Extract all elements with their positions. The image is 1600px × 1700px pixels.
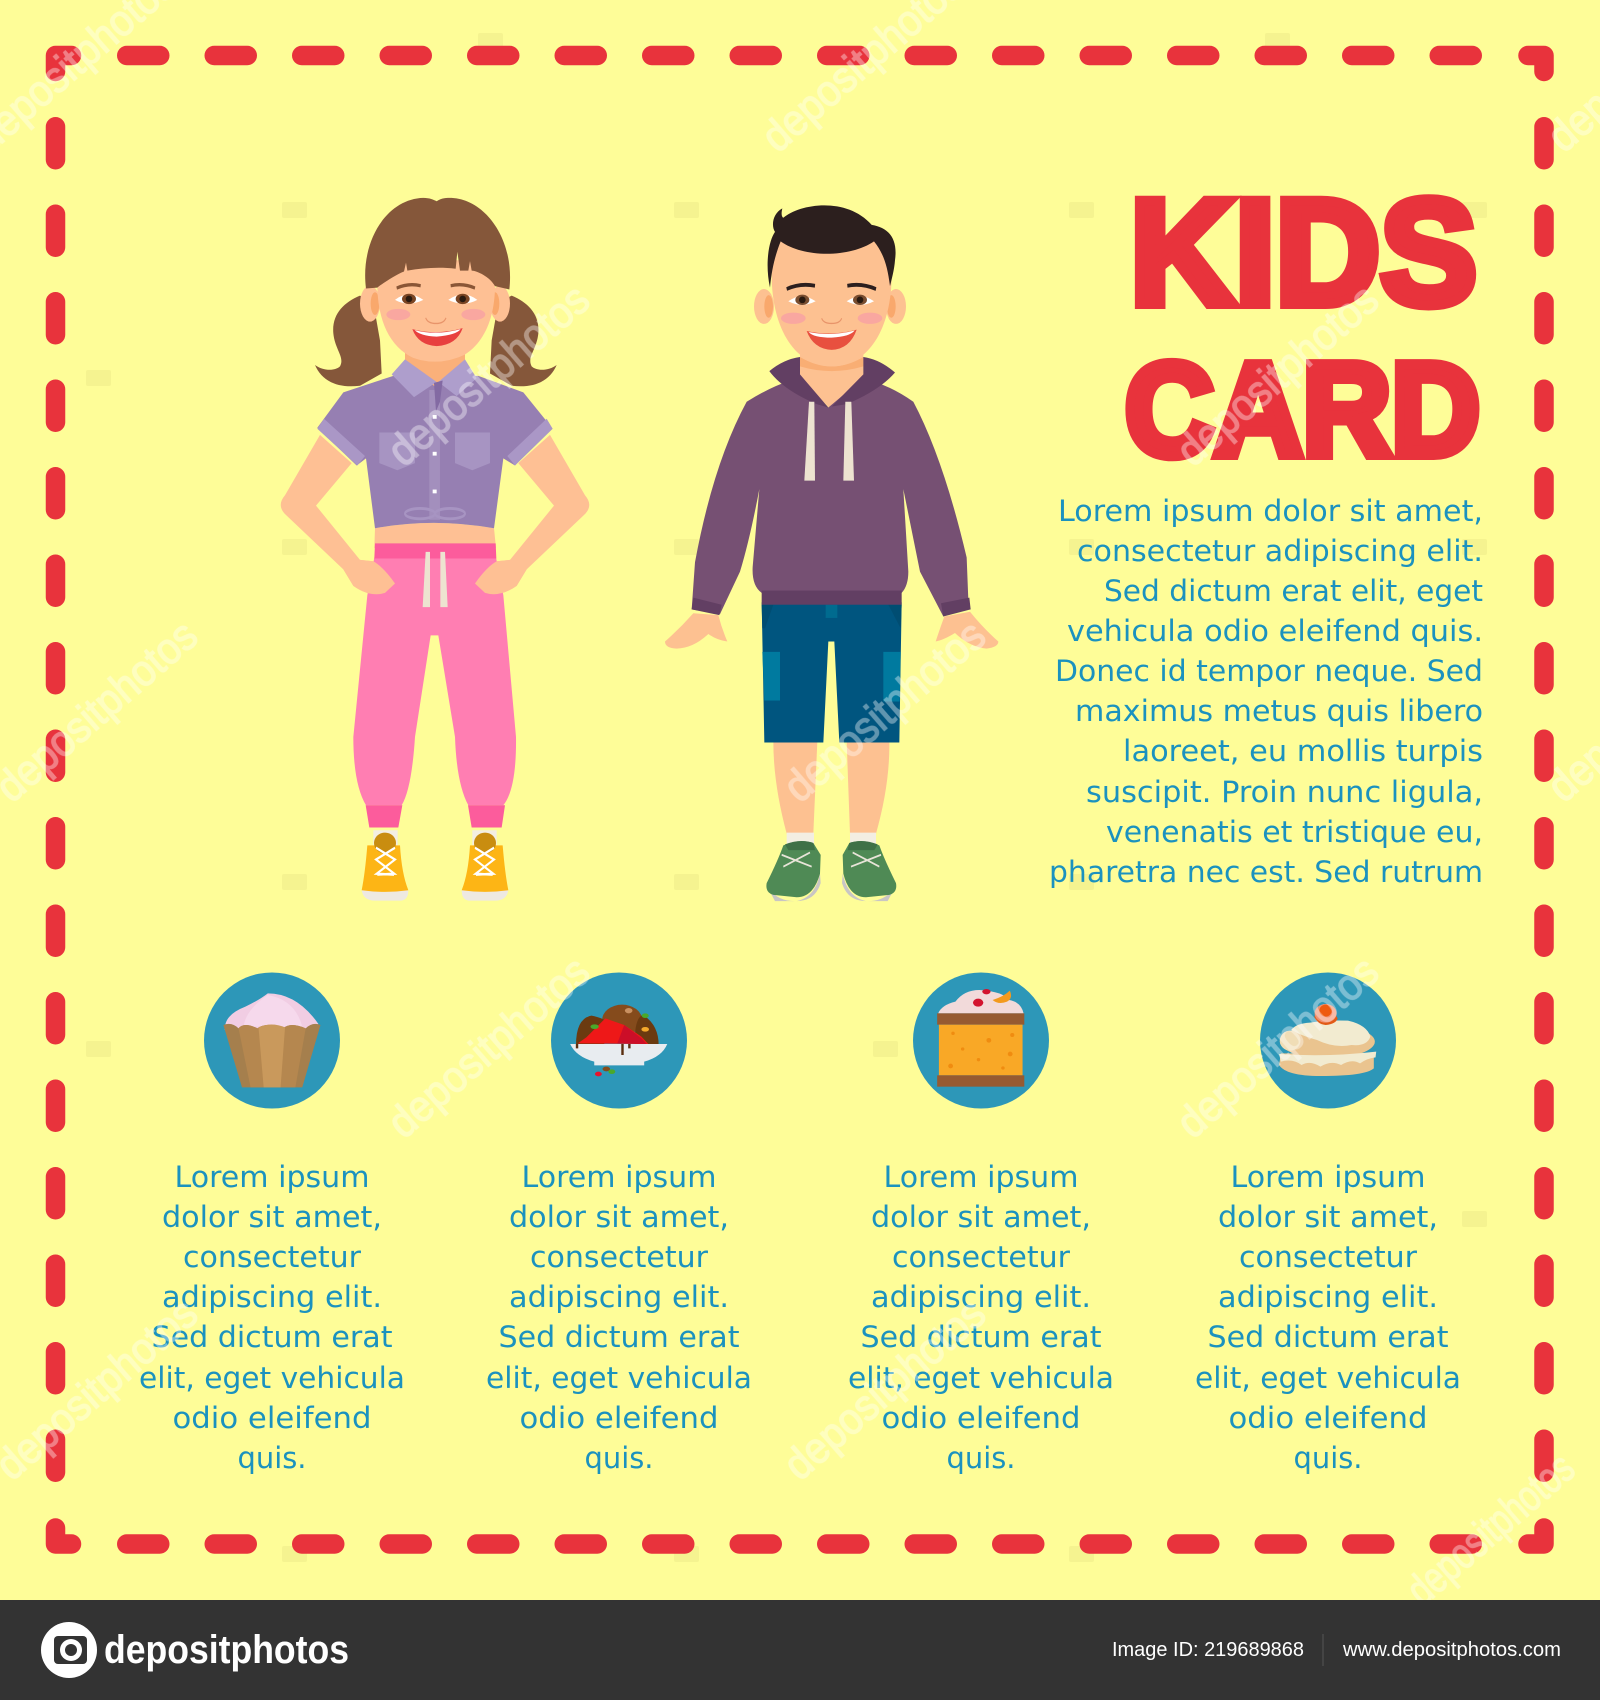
column text 1: adipiscing elit.	[162, 1280, 382, 1314]
column text 3: Lorem ipsum	[884, 1160, 1078, 1194]
boy character	[665, 205, 998, 901]
site url: www.depositphotos.com	[1342, 1639, 1561, 1661]
column text 3: Sed dictum erat	[860, 1320, 1102, 1354]
intro paragraph: maximus metus quis libero	[1075, 694, 1483, 728]
title: KIDS CARD: KIDS	[1130, 168, 1477, 336]
column text 4: Sed dictum erat	[1208, 1320, 1448, 1354]
watermarks: depositphotos	[774, 611, 995, 812]
column text 3: dolor sit amet,	[871, 1200, 1091, 1234]
column text 3: quis.	[946, 1441, 1016, 1475]
title: KIDS CARD	[1125, 168, 1480, 483]
icon: cupcake	[204, 972, 340, 1108]
column text 1: Sed dictum erat	[152, 1320, 392, 1354]
intro paragraph: venenatis et tristique eu,	[1106, 815, 1483, 849]
girl right shoe	[462, 830, 508, 901]
column text 4: quis.	[1294, 1441, 1362, 1475]
icon: layer cake	[913, 972, 1049, 1108]
column text 2: Sed dictum erat	[498, 1320, 740, 1354]
column text 3: elit, eget vehicula	[848, 1361, 1114, 1395]
column text 2: quis.	[584, 1441, 654, 1475]
column text 1: dolor sit amet,	[162, 1200, 382, 1234]
column text 4: consectetur	[1239, 1240, 1418, 1274]
intro paragraph: laoreet, eu mollis turpis	[1123, 734, 1483, 768]
girl character	[281, 198, 589, 901]
column text 2: adipiscing elit.	[509, 1280, 729, 1314]
footer logo icon	[41, 1622, 97, 1678]
intro paragraph: consectetur adipiscing elit.	[1077, 534, 1483, 568]
icon: cream pastry	[1260, 972, 1396, 1108]
title: KIDS CARD: CARD	[1125, 336, 1480, 483]
watermarks: depositphotos	[1167, 947, 1388, 1148]
intro paragraph: vehicula odio eleifend quis.	[1067, 614, 1483, 648]
column text 2: Lorem ipsum	[522, 1160, 716, 1194]
watermarks: depositphotos	[774, 1289, 995, 1490]
girl face details	[386, 285, 485, 346]
intro paragraph	[1049, 494, 1483, 889]
boy left shoe	[766, 833, 821, 901]
watermarks: depositphotos	[1167, 275, 1388, 476]
column text 3: adipiscing elit.	[871, 1280, 1091, 1314]
column text 2: dolor sit amet,	[509, 1200, 729, 1234]
faint camera marks	[86, 33, 1487, 1562]
boy right shoe	[842, 833, 896, 901]
intro paragraph: pharetra nec est. Sed rutrum	[1049, 855, 1483, 889]
icon: ice cream bowl	[551, 972, 687, 1108]
intro paragraph: suscipit. Proin nunc ligula,	[1086, 775, 1483, 809]
column text 1: quis.	[238, 1441, 306, 1475]
column text 2: consectetur	[530, 1240, 709, 1274]
boy face details	[781, 285, 882, 350]
column text 4: adipiscing elit.	[1218, 1280, 1438, 1314]
column text 2: elit, eget vehicula	[486, 1361, 752, 1395]
column text 1: odio eleifend	[172, 1401, 372, 1435]
column text 4: dolor sit amet,	[1218, 1200, 1438, 1234]
column text 1: consectetur	[183, 1240, 362, 1274]
image id: Image ID: 219689868	[1112, 1639, 1304, 1661]
intro paragraph: Donec id tempor neque. Sed	[1055, 654, 1483, 688]
column text 2: odio eleifend	[520, 1401, 718, 1435]
column text 4: Lorem ipsum	[1230, 1160, 1426, 1194]
column text 4	[1195, 1160, 1461, 1475]
column text 4: elit, eget vehicula	[1195, 1361, 1461, 1395]
column text 3: odio eleifend	[882, 1401, 1080, 1435]
footer bar	[0, 1600, 1600, 1700]
column text 2	[486, 1160, 752, 1475]
column text 1: elit, eget vehicula	[139, 1361, 405, 1395]
intro paragraph: Sed dictum erat elit, eget	[1104, 574, 1483, 608]
watermarks: depositphotos	[378, 947, 599, 1148]
column text 3	[848, 1160, 1114, 1475]
column text 4: odio eleifend	[1228, 1401, 1428, 1435]
footer logo wordmark: depositphotos	[104, 1628, 349, 1672]
column text 1	[139, 1160, 405, 1475]
girl left shoe	[362, 830, 408, 901]
column text 1: Lorem ipsum	[174, 1160, 370, 1194]
intro paragraph: Lorem ipsum dolor sit amet,	[1058, 494, 1483, 528]
watermarks: depositphotos	[378, 275, 599, 476]
column text 3: consectetur	[892, 1240, 1071, 1274]
